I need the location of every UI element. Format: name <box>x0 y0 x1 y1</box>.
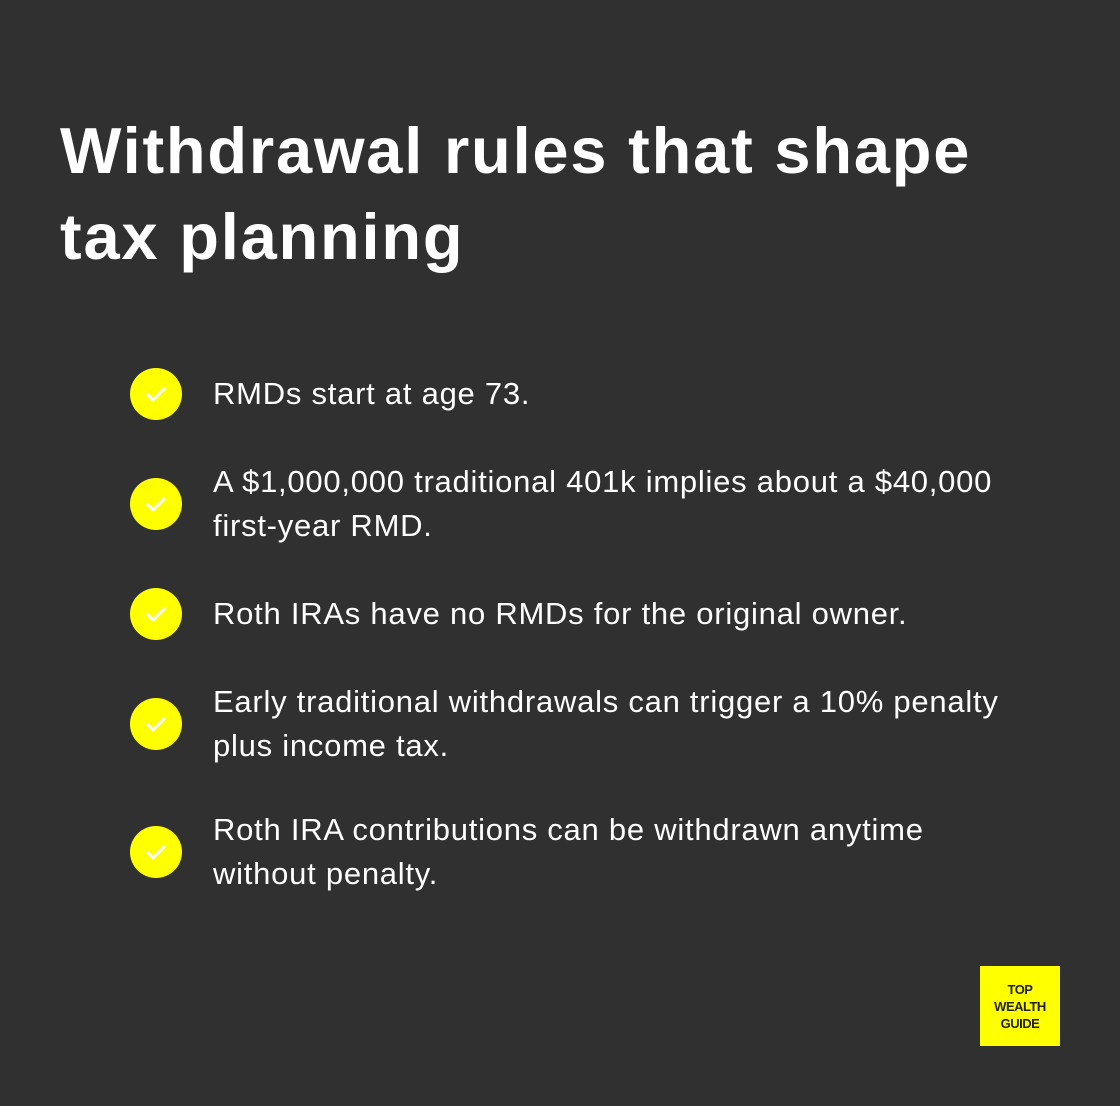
item 1 <box>130 368 530 420</box>
item 5 <box>130 812 924 891</box>
logo: TOP <box>1007 982 1032 996</box>
title <box>60 114 971 273</box>
item 3 <box>130 588 907 640</box>
text 1: RMDs start at age 73. <box>213 376 530 411</box>
text 4: plus income tax. <box>213 728 449 763</box>
text 5 <box>213 812 924 891</box>
text 4: Early traditional withdrawals can trigger a 10% penalty <box>213 684 999 719</box>
icon: check <box>130 698 182 750</box>
title: tax planning <box>60 200 464 273</box>
icon: check <box>130 478 182 530</box>
text 4 <box>213 684 999 763</box>
text 2 <box>213 464 992 543</box>
icon: check <box>130 588 182 640</box>
item 4 <box>130 684 999 763</box>
text 3: Roth IRAs have no RMDs for the original owner. <box>213 596 907 631</box>
logo: WEALTH <box>994 998 1046 1014</box>
logo <box>980 966 1060 1046</box>
icon: check <box>130 826 182 878</box>
icon: check <box>130 368 182 420</box>
text 5: without penalty. <box>213 856 438 891</box>
text 5: Roth IRA contributions can be withdrawn anytime <box>213 812 924 847</box>
title: Withdrawal rules that shape <box>60 114 971 187</box>
item 2 <box>130 464 992 543</box>
text 2: A $1,000,000 traditional 401k implies about a $40,000 <box>213 464 992 499</box>
logo: GUIDE <box>1001 1016 1039 1030</box>
text 2: first-year RMD. <box>213 508 433 543</box>
